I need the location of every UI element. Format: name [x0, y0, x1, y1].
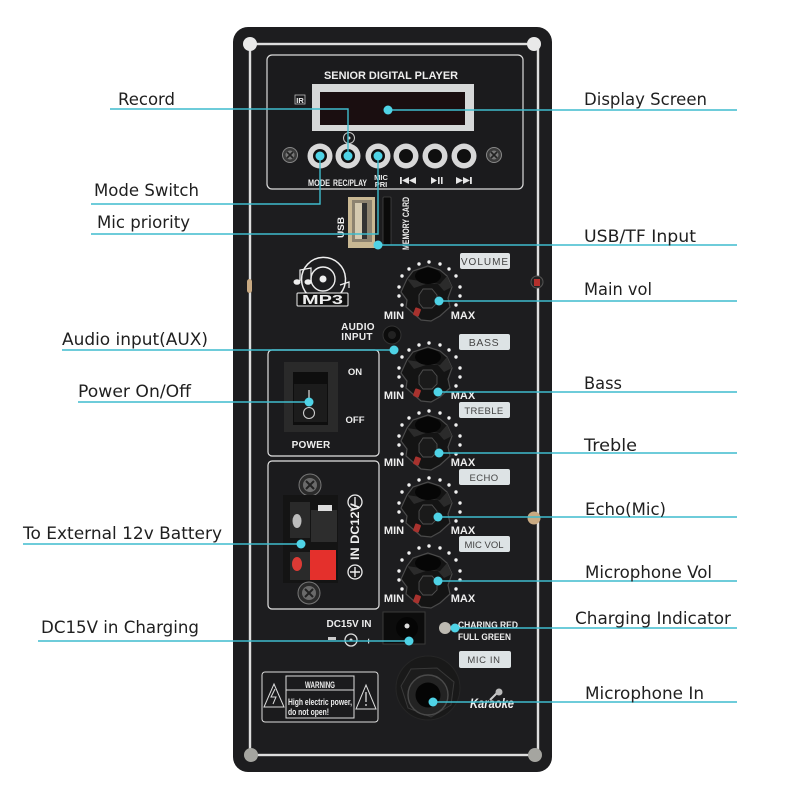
- knob: echo: MAX: [451, 525, 476, 537]
- callout: echo: [434, 499, 737, 522]
- knob: echo: [384, 469, 510, 537]
- callout: microphone vol: [434, 562, 737, 586]
- knob: treble: MIN: [384, 457, 404, 469]
- panel: power switch: POWER: [292, 440, 331, 451]
- MP3 logo: [294, 257, 349, 307]
- IR label: [295, 95, 305, 105]
- callout: display screen: [384, 89, 737, 114]
- callout: bass: Bass: [584, 373, 622, 393]
- callout: bass: [434, 373, 737, 396]
- USB port: [336, 197, 375, 248]
- callout: record: [110, 89, 352, 160]
- callout: charging indicator: [450, 608, 737, 632]
- callout: DC15V in charging: DC15V in Charging: [41, 617, 199, 637]
- callout: charging indicator: Charging Indicator: [575, 608, 731, 628]
- button labels: REC/PLAY: [333, 178, 367, 189]
- knob: echo: ECHO: [469, 473, 499, 484]
- DC15V charging jack: [326, 612, 425, 646]
- microphone jack: [396, 656, 460, 720]
- knob: treble: TREBLE: [464, 406, 504, 417]
- warning label: WARNING: [305, 680, 335, 690]
- button labels: MODE: [308, 178, 330, 189]
- callout: DC15V in charging: [38, 617, 414, 646]
- callout: USB/TF input: USB/TF Input: [584, 226, 696, 246]
- warning label: [262, 672, 378, 722]
- callout: USB/TF input: [374, 226, 737, 250]
- callout: power on/off: Power On/Off: [78, 381, 191, 401]
- knob: bass: MAX: [451, 390, 476, 402]
- knob: volume: MIN: [384, 310, 404, 322]
- knob: bass: MIN: [384, 390, 404, 402]
- charging LED indicator: CHARING RED: [458, 620, 518, 631]
- callout: mode switch: Mode Switch: [94, 180, 199, 200]
- callout: audio input: Audio input(AUX): [62, 329, 208, 349]
- callout: microphone in: [428, 683, 737, 706]
- callout: microphone vol: Microphone Vol: [585, 562, 712, 582]
- panel: amplifier board: [233, 27, 552, 772]
- label: mic in: [459, 651, 511, 668]
- buttons: [282, 144, 502, 168]
- knob: echo: MIN: [384, 525, 404, 537]
- knob: mic vol: MAX: [451, 593, 476, 605]
- icons: transport controls: [400, 177, 472, 184]
- callout: microphone in: Microphone In: [585, 683, 704, 703]
- charging LED indicator: [439, 620, 518, 643]
- karaoke logo: Karaoke: [470, 696, 514, 711]
- panel: power switch: [268, 350, 379, 456]
- knob: volume: VOLUME: [461, 257, 509, 268]
- button labels: PRI: [375, 180, 387, 189]
- karaoke logo: [470, 688, 514, 711]
- callout: mic priority: Mic priority: [97, 212, 190, 232]
- callout: external battery: [22, 523, 305, 548]
- callout: external battery: To External 12v Battery: [22, 523, 222, 543]
- TF card slot: [383, 197, 412, 250]
- callout: mic priority: [91, 152, 382, 234]
- knob: treble: MAX: [451, 457, 476, 469]
- IR label: IR: [296, 96, 304, 105]
- DC15V charging jack: DC15V IN: [326, 619, 372, 630]
- panel: power switch: ON: [348, 367, 362, 378]
- display screen: [312, 84, 474, 131]
- heading: senior digital player: SENIOR DIGITAL PLAYER: [324, 70, 458, 82]
- callout: display screen: Display Screen: [584, 89, 707, 109]
- knob: treble: [384, 402, 510, 470]
- panel: digital player module: [267, 55, 523, 189]
- callout: treble: Treble: [583, 435, 637, 455]
- knob: volume: [384, 253, 510, 322]
- knob: volume: MAX: [451, 310, 476, 322]
- callout: power on/off: [78, 381, 314, 406]
- audio input jack: [341, 322, 401, 344]
- knob: mic vol: MIN: [384, 593, 404, 605]
- callout: mode switch: [91, 152, 324, 204]
- knob: mic vol: MIC VOL: [464, 540, 504, 551]
- warning label: High electric power,: [288, 697, 352, 708]
- audio input jack: AUDIO: [341, 322, 375, 333]
- TF card slot: MEMORY CARD: [401, 197, 412, 250]
- warning label: do not open!: [288, 707, 329, 718]
- callout: treble: [434, 435, 737, 458]
- icon: sensor: [344, 132, 354, 144]
- label: mic in: MIC IN: [467, 655, 501, 666]
- DC15V charging jack: +: [366, 636, 371, 646]
- knob: bass: [384, 334, 510, 402]
- panel: battery terminal: [268, 461, 379, 609]
- knob: bass: BASS: [469, 337, 499, 349]
- knob: mic vol: [384, 536, 510, 608]
- USB port: USB: [336, 217, 347, 238]
- callout: main vol: [434, 279, 737, 306]
- button labels: MIC: [374, 173, 388, 182]
- audio input jack: INPUT: [341, 332, 373, 343]
- panel: power switch: OFF: [346, 415, 365, 426]
- callout: record: Record: [118, 89, 175, 109]
- MP3 logo: MP3: [302, 293, 343, 307]
- charging LED indicator: FULL GREEN: [458, 632, 511, 643]
- callout: main vol: Main vol: [584, 279, 652, 299]
- panel: battery terminal: IN DC12V: [350, 503, 362, 560]
- button labels: [308, 173, 388, 189]
- callout: audio input: [62, 329, 398, 354]
- callout: echo: Echo(Mic): [585, 499, 666, 519]
